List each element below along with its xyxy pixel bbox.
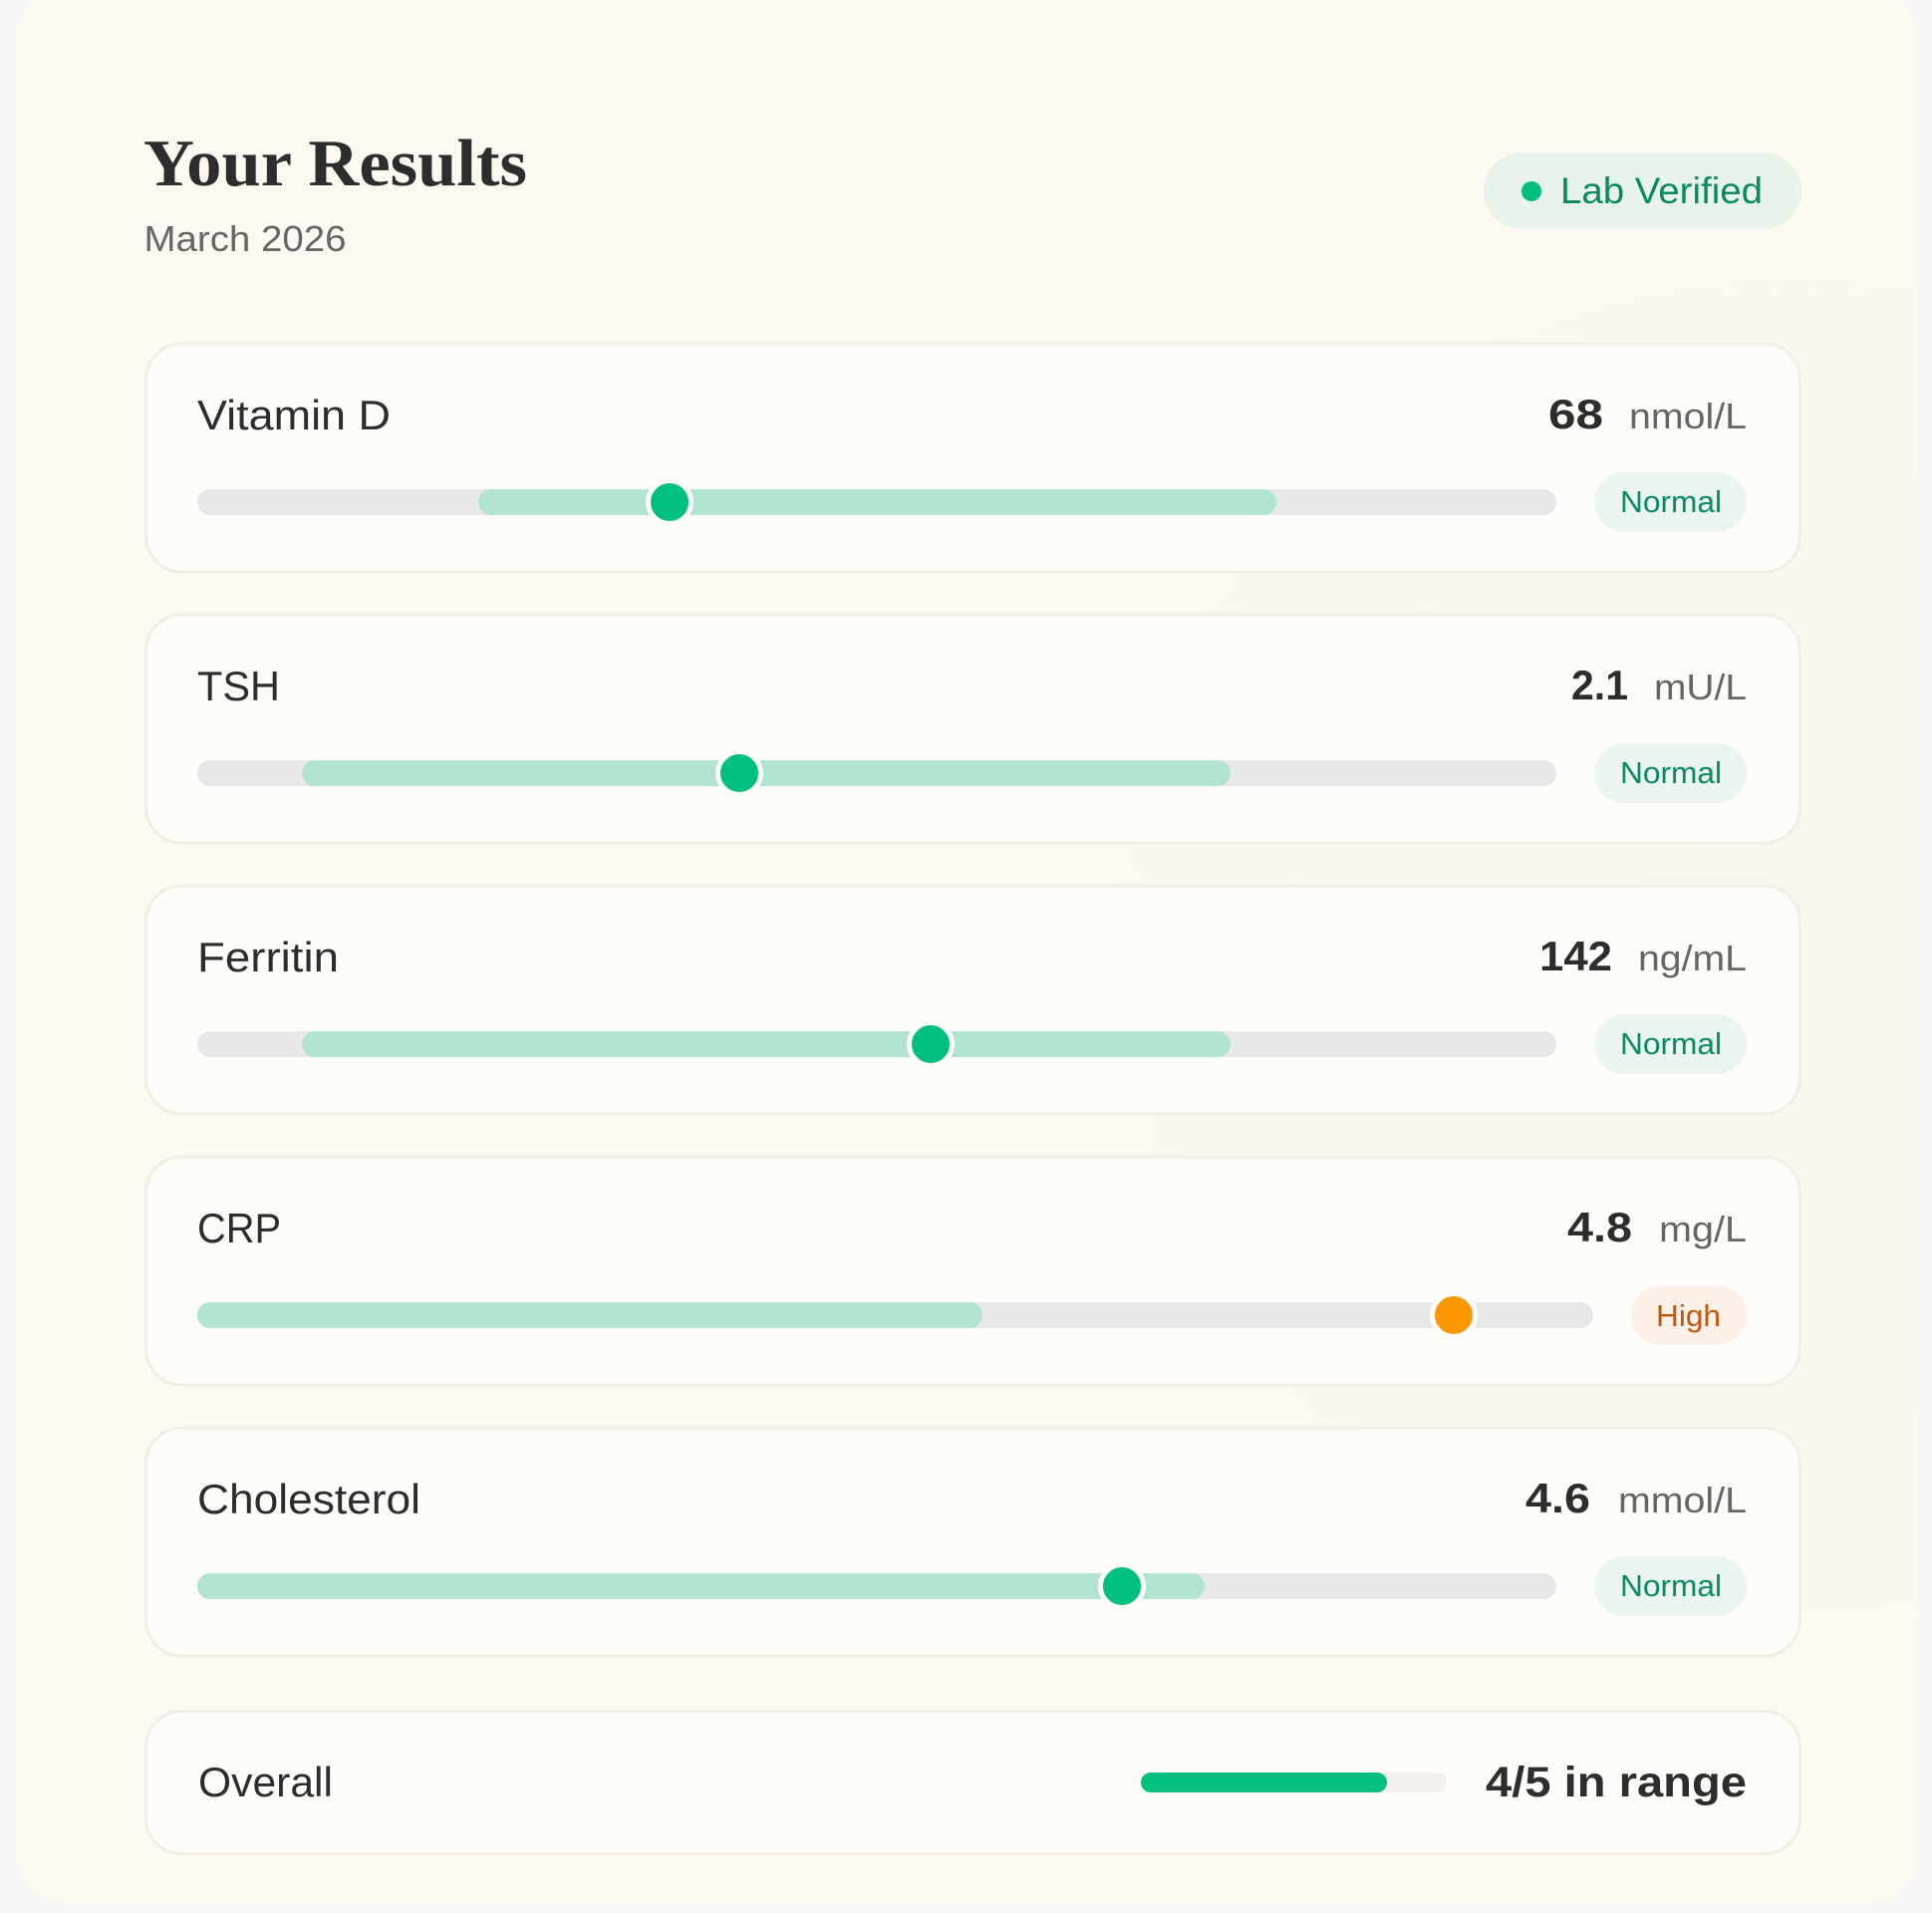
status: High: [1631, 1285, 1747, 1345]
title: Your Results: [143, 127, 527, 200]
summary: Overall: Overall: [198, 1759, 333, 1805]
badge: Lab Verified: Lab Verified: [1560, 170, 1763, 211]
badge: Lab Verified: [1484, 152, 1801, 229]
status: Normal: [1594, 1556, 1747, 1616]
row: Ferritin: ng/mL: [1638, 938, 1747, 978]
row: Ferritin: [145, 886, 1799, 1114]
row: Vitamin D: Vitamin D: [197, 392, 391, 438]
header: [143, 127, 1801, 259]
row: CRP: mg/L: [1659, 1209, 1747, 1249]
date: March 2026: [143, 218, 347, 259]
row: Vitamin D: [145, 344, 1799, 572]
status: Normal: [1594, 743, 1747, 803]
row: Ferritin: 142: [1539, 933, 1612, 979]
row: TSH: mU/L: [1654, 667, 1747, 707]
row: TSH: TSH: [197, 663, 280, 709]
row: Cholesterol: mmol/L: [1618, 1480, 1747, 1520]
range track: [197, 1564, 1556, 1608]
status: Normal: [1594, 472, 1747, 532]
row: Ferritin: Ferritin: [197, 934, 339, 980]
status: Normal: Normal: [1620, 1568, 1722, 1603]
range track: [197, 751, 1556, 795]
range track: [197, 1293, 1593, 1337]
row: Cholesterol: [145, 1428, 1799, 1656]
overall score: 4/5 in range: [1486, 1759, 1747, 1806]
status: High: High: [1656, 1298, 1721, 1333]
summary: Overall: [145, 1712, 1799, 1853]
row: TSH: 2.1: [1571, 662, 1628, 708]
range track: [197, 1022, 1556, 1066]
row: Cholesterol: Cholesterol: [197, 1476, 420, 1522]
range track: [197, 480, 1556, 524]
row: TSH: [145, 615, 1799, 843]
overall progress bar: [1141, 1773, 1447, 1792]
status: Normal: [1594, 1014, 1747, 1074]
row: CRP: [145, 1157, 1799, 1385]
row: CRP: 4.8: [1567, 1204, 1632, 1250]
row: Vitamin D: nmol/L: [1629, 396, 1747, 436]
status: Normal: Normal: [1620, 755, 1722, 790]
status: Normal: Normal: [1620, 1026, 1722, 1061]
row: CRP: CRP: [197, 1205, 281, 1251]
row: Cholesterol: 4.6: [1525, 1475, 1590, 1521]
status: Normal: Normal: [1620, 484, 1722, 519]
row: Vitamin D: 68: [1548, 391, 1603, 437]
